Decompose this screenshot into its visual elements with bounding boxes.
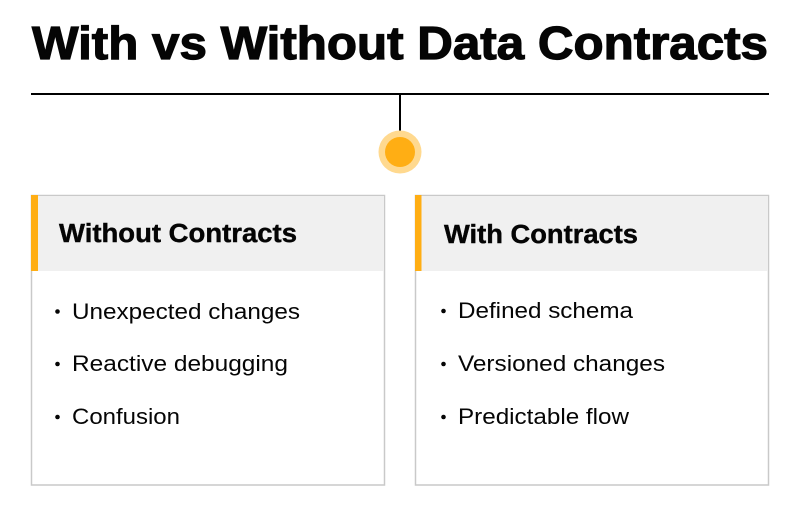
list: without contracts: Unexpected changes — [72, 299, 300, 324]
panel header: without contracts — [32, 196, 384, 271]
list: without contracts: Reactive debugging — [72, 351, 288, 376]
heading: with contracts: With Contracts — [444, 221, 638, 249]
accent bar: without contracts — [31, 195, 38, 271]
list: with contracts: Predictable flow — [458, 404, 630, 429]
list: with contracts: Versioned changes — [458, 351, 665, 376]
connector: horizontal rule and stem — [31, 93, 769, 131]
title: With vs Without Data Contracts — [32, 17, 768, 69]
icon: orange node — [378, 130, 422, 174]
panel: with contracts — [415, 195, 768, 485]
heading: without contracts: Without Contracts — [59, 220, 297, 248]
panel: without contracts — [31, 195, 384, 485]
list: with contracts: Defined schema — [458, 298, 634, 323]
panel header: with contracts — [416, 196, 768, 271]
list: without contracts — [55, 299, 300, 429]
list: with contracts — [441, 298, 665, 429]
accent bar: with contracts — [415, 195, 422, 271]
list: without contracts: Confusion — [72, 404, 180, 429]
